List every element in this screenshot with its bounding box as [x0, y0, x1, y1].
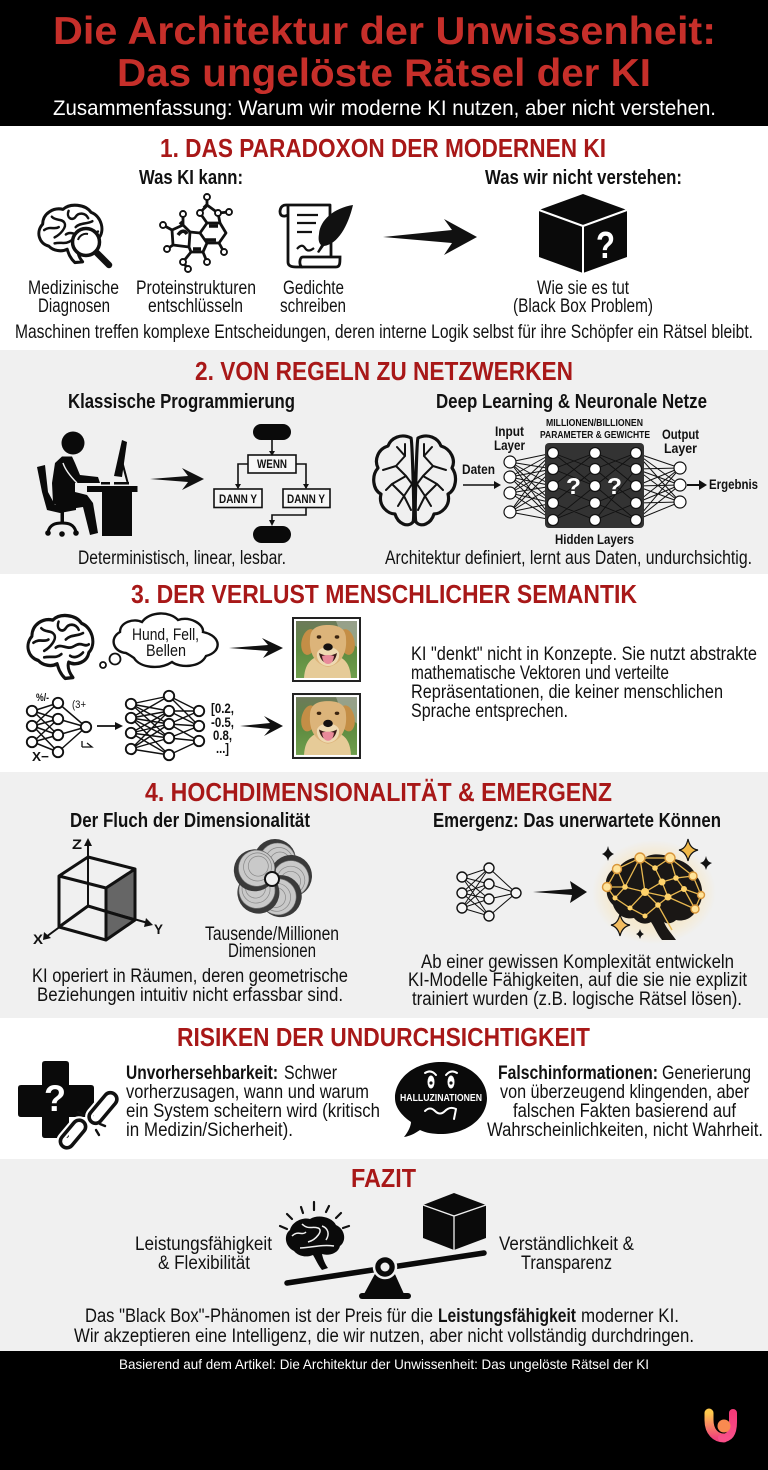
arrow — [383, 219, 477, 255]
subheading: was KI kann: Was KI kann: — [139, 166, 243, 189]
icon: small neural net — [457, 863, 521, 921]
text block: unvorhersehbarkeit: Unvorhersehbarkeit: — [126, 1063, 278, 1084]
box: dann y right: DANN Y — [287, 492, 325, 506]
title — [53, 10, 716, 95]
panel: 1 paradox — [0, 126, 768, 350]
logo — [709, 1413, 733, 1438]
arrow — [240, 716, 283, 736]
caption: proteine — [136, 278, 256, 317]
title banner — [0, 0, 768, 126]
icon: balance scale — [280, 1193, 486, 1299]
heading: section 4: 4. HOCHDIMENSIONALITÄT & EMERGENZ — [145, 777, 612, 807]
icon: programmer at desk — [37, 432, 138, 537]
diagram: neural network: ? — [607, 473, 622, 499]
caption: gedichte — [280, 278, 346, 317]
text block: emergenz — [408, 952, 748, 1010]
caption: black box — [513, 278, 653, 317]
text block: unvorhersehbarkeit: ein System scheitern wird (kritisch — [126, 1101, 380, 1122]
icon: hallucination bubble: HALLUZINATIONEN — [400, 1093, 482, 1104]
label: hidden layers: Hidden Layers — [555, 531, 634, 547]
footer — [0, 1351, 768, 1470]
arrow — [533, 881, 587, 903]
icon: hyperdimensional spiral — [228, 839, 317, 925]
caption: diagnosen: Medizinische — [28, 278, 119, 299]
text block: falschinformationen: Generierung — [662, 1063, 751, 1084]
panel: risks — [0, 1018, 768, 1159]
subheading: klassische programmierung: Klassische Programmierung — [68, 390, 295, 413]
icon: 3d cube with axes: Z — [72, 836, 83, 852]
label: verstaendlichkeit: Transparenz — [521, 1253, 612, 1274]
photo: dog — [293, 618, 360, 681]
text block: falschinformationen: Falschinformationen: — [498, 1063, 658, 1084]
source line: Basierend auf dem Artikel: Die Architektur der Unwissenheit: Das ungelöste Rätsel der KI — [119, 1356, 649, 1372]
text block: emergenz: Ab einer gewissen Komplexität entwickeln — [421, 952, 734, 973]
heading: fazit: FAZIT — [351, 1163, 416, 1193]
thought cloud — [100, 613, 218, 668]
subtitle: Zusammenfassung: Warum wir moderne KI nutzen, aber nicht verstehen. — [53, 96, 716, 120]
caption: gedichte: schreiben — [280, 296, 346, 317]
text block: unvorhersehbarkeit: Schwer — [284, 1063, 338, 1084]
text block: semantics — [411, 644, 757, 722]
panel: fazit — [0, 1159, 768, 1351]
arrow — [97, 722, 123, 730]
text block: conclusion: moderner KI. — [581, 1306, 679, 1327]
icon: black cube — [423, 1193, 486, 1250]
icon: brain with magnifier — [39, 205, 109, 265]
vector numbers: 0.8, — [213, 727, 232, 743]
caption: dimensionen: Tausende/Millionen — [205, 924, 339, 945]
caption: diagnosen: Diagnosen — [38, 296, 110, 317]
label: input layer: Layer — [494, 437, 525, 453]
text block: raeume — [32, 966, 348, 1006]
label: daten: Daten — [462, 461, 495, 477]
text block: unvorhersehbarkeit — [126, 1063, 380, 1141]
thought cloud: Bellen — [146, 641, 186, 660]
arrow — [687, 480, 707, 490]
heading: section 1: 1. DAS PARADOXON DER MODERNEN KI — [160, 133, 606, 163]
heading: section 2: 2. VON REGELN ZU NETZWERKEN — [195, 356, 573, 386]
icon: small neural net with math — [27, 692, 92, 764]
subheading: was wir nicht verstehen: Was wir nicht verstehen: — [485, 166, 682, 189]
icon: cross with broken chain — [18, 1061, 120, 1150]
diagram: neural network — [504, 443, 686, 528]
label: output layer: Output — [662, 426, 699, 442]
icon: 3d cube with axes: Y — [154, 921, 164, 937]
thought cloud: Hund, Fell, — [132, 625, 199, 644]
text block: conclusion: Wir akzeptieren eine Intelligenz, die wir nutzen, aber nicht vollständig durchdringen. — [74, 1326, 694, 1347]
vector numbers — [211, 700, 234, 756]
icon: glowing brain — [592, 839, 716, 944]
title: Das ungelöste Rätsel der KI — [117, 52, 651, 95]
panel: 4 dimensionality and emergence — [0, 772, 768, 1018]
caption: diagnosen — [28, 278, 119, 317]
box: wenn: WENN — [257, 457, 287, 471]
text block: semantics: Sprache entsprechen. — [411, 701, 568, 722]
label: parameter: MILLIONEN/BILLIONEN — [546, 417, 643, 429]
icon: black brain — [280, 1202, 349, 1270]
icon: black box — [539, 194, 627, 273]
icon: 3d cube with axes: X — [33, 931, 44, 947]
diagram: neural network: ? — [566, 473, 581, 499]
text block: unvorhersehbarkeit: vorherzusagen, wann und warum — [126, 1082, 369, 1103]
icon: black box: ? — [596, 225, 615, 267]
caption: dimensionen — [205, 924, 339, 962]
text block: conclusion: Leistungsfähigkeit — [438, 1306, 577, 1327]
text block: semantics: mathematische Vektoren und verteilte — [411, 663, 669, 684]
text block: falschinformationen — [487, 1063, 763, 1141]
arrow — [150, 468, 204, 490]
icon: molecule — [160, 194, 232, 272]
flowchart — [214, 424, 330, 543]
icon: cross with broken chain: ? — [44, 1078, 66, 1119]
label: output layer — [662, 426, 699, 456]
caption: dimensionen: Dimensionen — [228, 941, 316, 962]
text block: conclusion — [74, 1306, 694, 1347]
label: leistungsfaehigkeit: Leistungsfähigkeit — [135, 1234, 273, 1255]
vector numbers: [0.2, — [211, 700, 234, 716]
vector numbers: ...] — [216, 740, 229, 756]
label: input layer — [494, 423, 525, 453]
label: input layer: Input — [495, 423, 524, 439]
label: leistungsfaehigkeit — [135, 1234, 273, 1274]
title: Die Architektur der Unwissenheit: — [53, 10, 716, 53]
icon: scroll and feather — [280, 205, 353, 267]
label: ergebnis: Ergebnis — [709, 476, 758, 492]
vector numbers: -0.5, — [211, 714, 234, 730]
text block: unvorhersehbarkeit: in Medizin/Sicherheit). — [126, 1120, 293, 1141]
label: parameter: PARAMETER & GEWICHTE — [540, 429, 650, 441]
icon: hallucination bubble — [395, 1062, 487, 1137]
icon: small neural net with math: %/- — [36, 692, 49, 704]
panel: 2 rules to networks — [0, 350, 768, 574]
label: verstaendlichkeit: Verständlichkeit & — [499, 1234, 634, 1255]
arrow — [229, 638, 283, 658]
caption: black box: (Black Box Problem) — [513, 296, 653, 317]
text block: falschinformationen: falschen Fakten basierend auf — [513, 1101, 737, 1122]
icon: brain with circuits — [374, 436, 455, 525]
arrow — [463, 481, 501, 489]
panel: 3 semantics — [0, 574, 768, 772]
text block: raeume: KI operiert in Räumen, deren geometrische — [32, 966, 348, 987]
caption: gedichte: Gedichte — [283, 278, 344, 299]
icon: neural net — [126, 691, 204, 760]
icon: 3d cube with axes — [33, 836, 164, 947]
box: dann y left: DANN Y — [219, 492, 257, 506]
photo: dog — [293, 694, 360, 758]
heading: risks: RISIKEN DER UNDURCHSICHTIGKEIT — [177, 1022, 590, 1052]
caption: black box: Wie sie es tut — [537, 278, 630, 299]
label: verstaendlichkeit — [499, 1234, 634, 1274]
caption: deterministisch: Deterministisch, linear, lesbar. — [78, 548, 286, 569]
subheading: deep learning: Deep Learning & Neuronale Netze — [436, 390, 707, 413]
text block: semantics: Repräsentationen, die keiner menschlichen — [411, 682, 723, 703]
caption: proteine: Proteinstrukturen — [136, 278, 256, 299]
label: leistungsfaehigkeit: & Flexibilität — [158, 1253, 251, 1274]
icon: small neural net with math: (3+ — [72, 699, 86, 711]
subheading: fluch: Der Fluch der Dimensionalität — [70, 809, 310, 832]
text block: conclusion: Das "Black Box"-Phänomen ist der Preis für die — [85, 1306, 433, 1327]
label: output layer: Layer — [664, 440, 697, 456]
text block: raeume: Beziehungen intuitiv nicht erfassbar sind. — [37, 985, 343, 1006]
icon: small neural net with math: X− — [32, 749, 49, 764]
heading: section 3: 3. DER VERLUST MENSCHLICHER SEMANTIK — [131, 579, 637, 609]
label: parameter — [540, 417, 650, 441]
icon: brain — [28, 616, 93, 678]
caption: proteine: entschlüsseln — [148, 296, 243, 317]
